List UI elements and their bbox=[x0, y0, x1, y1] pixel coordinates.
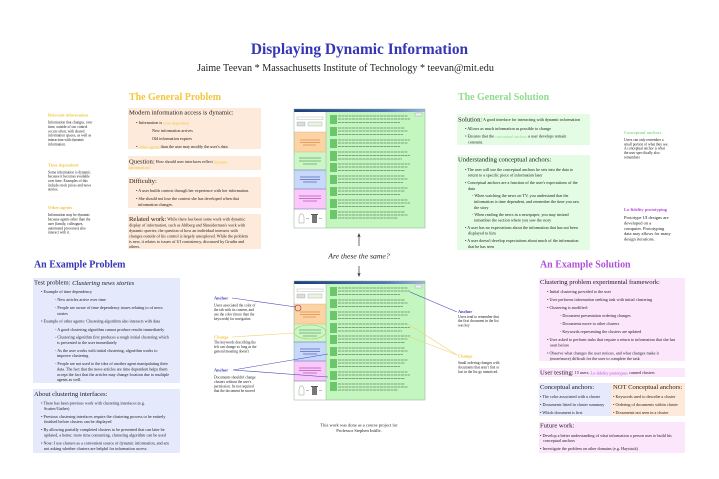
panel: clustering experimental framework: • User performs information seeking task with initial clustering bbox=[547, 297, 652, 302]
panel: difficulty: Difficulty: bbox=[129, 178, 157, 185]
sidebar: conceptual anchors: Users can only remember a bbox=[624, 138, 664, 142]
panel: related work: dynamic queries, the question of how an individual interacts with bbox=[129, 228, 239, 234]
panel: future work: Future work: bbox=[540, 422, 574, 430]
panel: conceptual anchors list: • Documents listed in cluster summary bbox=[540, 402, 605, 407]
sidebar: conceptual anchors: small portion of what they see. bbox=[624, 142, 669, 146]
panel: understanding conceptual anchors: • The user will use the conceptual anchors he sets into the data to bbox=[465, 167, 573, 172]
panel: test problem: • Example of time dependency bbox=[41, 289, 93, 294]
panel: related work: is new, it relates to issues of UI consistency, discussed by Grudin and bbox=[129, 239, 245, 245]
panel: solution: • Ensures that the conceptual anchors a user develops remain bbox=[465, 134, 567, 138]
panel: clustering experimental framework: - Documents move to other clusters bbox=[560, 321, 620, 326]
panel: about clustering interfaces: Scatter/Gather) bbox=[44, 406, 70, 411]
sidebar: conceptual anchors: Conceptual anchors bbox=[624, 130, 662, 135]
sidebar: time dependent bbox=[48, 162, 92, 192]
screenshot: clustering interface, annotated bbox=[294, 281, 425, 400]
sidebar: other agents bbox=[48, 205, 91, 235]
annotation: anchor, documents: Documents shouldn't change bbox=[214, 376, 256, 380]
panel: test problem bbox=[33, 278, 180, 383]
panel: question: information? bbox=[129, 165, 151, 170]
panel: about clustering interfaces: updated, a better, more time consuming, clustering algorithm can be used bbox=[44, 432, 167, 438]
panel: modern information access: Modern information access is dynamic: bbox=[129, 110, 234, 116]
annotation: anchor, first document: was key bbox=[458, 324, 470, 328]
annotation: change, ordering: lost in the list go unnoticed. bbox=[458, 370, 498, 374]
sidebar: relevant information: interaction with dynamic bbox=[48, 138, 84, 142]
sidebar: lo-fidelity prototyping: Prototype UI designs are bbox=[624, 215, 669, 220]
panel: related work: others. bbox=[129, 244, 140, 249]
sidebar: relevant information bbox=[48, 112, 93, 146]
panel: test problem: agents as well. bbox=[57, 377, 81, 382]
panel: understanding conceptual anchors: information is time dependent, and remember the time you saw bbox=[474, 199, 579, 205]
annotation: change, ordering: documents that aren't first or bbox=[458, 366, 500, 370]
annotation: change, keywords: The keywords describing the bbox=[214, 340, 256, 344]
sidebar: conceptual anchors: remembers bbox=[624, 155, 641, 159]
panel: future work: conceptual anchors bbox=[543, 438, 575, 443]
annotation: change, ordering: Small ordering changes with bbox=[458, 361, 500, 365]
panel: test problem: - People are aware of time dependency issues relating to of news bbox=[55, 305, 163, 310]
footer note: This work was done as a course project for bbox=[320, 422, 398, 428]
panel: understanding conceptual anchors: return to a specific piece of information later bbox=[468, 172, 543, 178]
screenshot: dynamic clustering interface, original bbox=[294, 109, 425, 228]
sidebar: relevant information: information spaces, as well as bbox=[48, 134, 92, 139]
panel: understanding conceptual anchors: - When watching the news on TV, you understand that the bbox=[472, 193, 569, 199]
panel: solution bbox=[457, 114, 590, 145]
panel: about clustering interfaces: About clustering interfaces: bbox=[34, 391, 108, 398]
panel: conceptual anchors list: • Which document is first bbox=[540, 410, 583, 415]
panel: understanding conceptual anchors: the story bbox=[474, 205, 489, 210]
annotation: anchor, tab colour: keywords) for navigation bbox=[214, 317, 251, 321]
panel: user testing bbox=[539, 368, 685, 377]
sidebar: relevant information: time, outside of our control bbox=[48, 125, 87, 130]
panel: test problem: - New articles arrive over time bbox=[55, 297, 106, 302]
heading: the general problem: The General Problem bbox=[129, 92, 222, 103]
panel: modern information access: • Other agents than the user may modify the user's data bbox=[136, 144, 228, 149]
panel: understanding conceptual anchors: - When reading the news in a newspaper, you may instead bbox=[472, 212, 570, 218]
panel: clustering experimental framework: • User asked to perform tasks that require a return to information that she has bbox=[547, 337, 676, 342]
annotation: anchor, tab colour: use the color (more than the bbox=[214, 312, 255, 316]
heading: an example problem: An Example Problem bbox=[34, 260, 126, 270]
panel: understanding conceptual anchors: that he has seen bbox=[468, 244, 495, 249]
panel: test problem: stories bbox=[57, 311, 68, 316]
panel: question bbox=[128, 156, 261, 170]
sidebar: lo-fidelity prototyping: data may allows for many bbox=[624, 231, 671, 236]
footer note: Professor Stephen Intille. bbox=[336, 428, 382, 433]
annotation: anchor, first document bbox=[410, 292, 499, 328]
panel: user testing: User testing: 15 users, Lo-fidelity prototypes, canned clusters bbox=[540, 369, 655, 376]
panel: understanding conceptual anchors: • A user has no expectations about the information that has not been bbox=[465, 225, 579, 230]
sidebar: other agents: automated processes) also bbox=[48, 226, 86, 230]
panel: clustering experimental framework: - Keywords representing the clusters are updated bbox=[560, 329, 642, 334]
panel: not conceptual anchors list: • Documents not seen in a cluster bbox=[613, 410, 669, 415]
annotation: anchor, tab colour: the tab with its content, and bbox=[214, 308, 254, 313]
annotation: change, ordering: Change bbox=[458, 354, 472, 358]
panel: modern information access bbox=[128, 108, 261, 149]
panel: understanding conceptual anchors: data bbox=[468, 186, 475, 191]
panel: clustering experimental framework: • Clustering is modified: bbox=[547, 305, 588, 310]
panel: modern information access: • Information is time-dependent bbox=[136, 120, 190, 125]
panel: related work: Related work: While there has been some work with dynamic bbox=[129, 216, 246, 222]
panel: about clustering interfaces: • Previous clustering interfaces require the clustering process to be entirely bbox=[41, 414, 166, 419]
subtitle: author and affiliation: Jaime Teevan * Massachusetts Institute of Technology * teevan@mit.edu bbox=[197, 63, 494, 74]
sidebar: lo-fidelity prototyping: design iterations. bbox=[624, 236, 655, 242]
panel: solution: Solution: A good interface for interacting with dynamic information bbox=[458, 116, 581, 123]
annotation: anchor, first document: Anchor bbox=[458, 309, 472, 314]
sidebar: other agents: interact with it. bbox=[48, 231, 70, 235]
panel: test problem: is presented to the user immediately bbox=[57, 340, 118, 345]
sidebar: time dependent: because it becomes available bbox=[48, 175, 90, 179]
annotation: anchor, first document: Users tend to remember that bbox=[458, 315, 499, 319]
panel: solution: • Allows as much information as possible to change bbox=[465, 126, 551, 131]
sidebar: time dependent: stories. bbox=[48, 188, 58, 192]
panel: not conceptual anchors list: NOT Conceptual anchors: bbox=[613, 384, 682, 391]
arrow: down from question bbox=[358, 266, 360, 276]
annotation: anchor, documents: Anchor bbox=[214, 368, 228, 372]
annotation: change, ordering bbox=[408, 324, 500, 374]
panel: not conceptual anchors list: • Ordering of documents within cluster bbox=[613, 402, 678, 407]
sidebar: time dependent: over time. Examples of this bbox=[48, 179, 88, 183]
panel: test problem: accept the fact that the articles may change location due to multiple bbox=[57, 372, 169, 377]
panel: solution: constant. bbox=[468, 140, 483, 144]
panel: modern information access: New information arrives bbox=[152, 128, 193, 133]
sidebar: time dependent: Time dependent bbox=[48, 162, 79, 168]
panel: not conceptual anchors list: • Keywords used to describe a cluster bbox=[613, 394, 676, 399]
annotation: change, keywords: Change bbox=[214, 334, 228, 340]
panel: related work: display of information, such as Ahlberg and Shneiderman's work with bbox=[129, 222, 246, 228]
panel: clustering experimental framework bbox=[539, 278, 685, 361]
annotation: anchor, first document: the first document in the list bbox=[458, 319, 499, 323]
panel: test problem: - As the user works with initial clustering, algorithm works to bbox=[55, 348, 157, 354]
sidebar: lo-fidelity prototyping: developed on a bbox=[624, 220, 651, 226]
panel: about clustering interfaces: • Note: I use clusters as a convenient source of dynamic information, and am bbox=[41, 440, 169, 446]
panel: test problem: improve clustering bbox=[57, 353, 88, 358]
panel: conceptual anchors list: Conceptual anchors: bbox=[540, 384, 594, 391]
title: Displaying Dynamic Information bbox=[251, 41, 469, 58]
sidebar: other agents: user (family, colleagues, bbox=[48, 222, 83, 227]
sidebar: conceptual anchors: A conceptual anchor is what bbox=[624, 147, 665, 151]
panel: conceptual anchors list: • The color associated with a cluster bbox=[540, 394, 601, 399]
sidebar: lo-fidelity prototyping bbox=[624, 207, 671, 242]
panel: test problem: • Example of other agents: Clustering algorithm also interacts with data bbox=[41, 318, 160, 324]
panel: related work bbox=[128, 214, 261, 249]
footer note bbox=[320, 422, 398, 433]
annotation: change, keywords: general meaning doesn't bbox=[214, 350, 249, 354]
annotation: change, keywords: left can change so long as the bbox=[214, 345, 257, 349]
annotation: anchor, tab colour: Users associated the color of bbox=[214, 304, 256, 308]
sidebar: relevant information: Information that changes, over bbox=[48, 121, 93, 126]
panel: clustering experimental framework: • Initial clustering provided to the user bbox=[547, 289, 612, 294]
annotation: anchor, tab colour: Anchor bbox=[214, 296, 228, 300]
heading: an example solution: An Example Solution bbox=[540, 260, 631, 270]
panel: question: Question: How should user interfaces reflect dynamic bbox=[129, 158, 228, 165]
panel: future work: • Investigate the problem on other domains (e.g. Haystack) bbox=[540, 446, 639, 451]
panel: clustering experimental framework: Clustering problem experimental framework: bbox=[540, 279, 660, 286]
panel: future work bbox=[539, 422, 685, 453]
panel: related work: changes outside of his control is largely unexplored. While the problem bbox=[129, 234, 249, 238]
panel: about clustering interfaces: not asking whether clusters are helpful for information access bbox=[44, 446, 147, 451]
panel: test problem: Test problem: Clustering news stories bbox=[34, 280, 135, 286]
panel: clustering experimental framework: - Document presentation ordering changes bbox=[560, 313, 631, 318]
panel: not conceptual anchors list bbox=[611, 383, 685, 416]
panel: about clustering interfaces bbox=[33, 389, 180, 453]
heading: the general solution: The General Solution bbox=[458, 92, 550, 103]
panel: understanding conceptual anchors: Understanding conceptual anchors: bbox=[458, 156, 551, 164]
arrow: up from question bbox=[358, 234, 360, 246]
sidebar: other agents: because agents other than the bbox=[48, 217, 91, 221]
panel: about clustering interfaces: • By allowing partially completed clusters to be presented that can later be bbox=[41, 427, 165, 432]
panel: understanding conceptual anchors: remember the section where you saw the story bbox=[474, 218, 552, 222]
panel: difficulty: • A user builds context through her experience with her information. bbox=[136, 188, 249, 193]
panel: difficulty: information changes. bbox=[138, 202, 173, 207]
panel: future work: • Develop a better understanding of what information a person uses to build his bbox=[540, 433, 672, 438]
sidebar: relevant information: occurs often; with shared bbox=[48, 129, 85, 133]
sidebar: other agents: Other agents bbox=[48, 205, 72, 210]
sidebar: lo-fidelity prototyping: computer. Prototyping bbox=[624, 226, 665, 231]
sidebar: time dependent: include stock prices and news bbox=[48, 183, 92, 187]
sidebar: other agents: Information may be dynamic bbox=[48, 213, 90, 217]
panel: about clustering interfaces: finished before clusters can be displayed bbox=[44, 419, 112, 424]
sidebar: relevant information: information. bbox=[48, 142, 66, 146]
sidebar: conceptual anchors bbox=[624, 130, 669, 159]
sidebar: conceptual anchors: the user specifically also bbox=[624, 151, 660, 155]
annotation: anchor, documents: permission. Its not required bbox=[214, 384, 254, 388]
panel: clustering experimental framework: • Observe what changes the user notices, and what changes make it bbox=[547, 350, 660, 356]
question: are these the same: Are these the same? bbox=[327, 252, 390, 260]
panel: difficulty bbox=[128, 177, 261, 208]
panel: test problem: - People are not used to the idea of another agent manipulating their bbox=[55, 361, 168, 366]
sidebar: time dependent: Some information is dynamic bbox=[48, 170, 91, 174]
sidebar: lo-fidelity prototyping: Lo-fidelity prototyping bbox=[624, 207, 668, 212]
panel: clustering experimental framework: (more/more) difficult for the user to complete the task bbox=[550, 356, 641, 361]
annotation: change, keywords bbox=[214, 333, 294, 354]
annotation: anchor, documents: clusters without the user's bbox=[214, 380, 252, 384]
panel: modern information access: Old information expires bbox=[152, 136, 192, 141]
panel: understanding conceptual anchors: displayed to him bbox=[468, 230, 496, 236]
panel: conceptual anchors list bbox=[539, 383, 611, 416]
panel: understanding conceptual anchors: • A user doesn't develop expectations about much of the information bbox=[465, 238, 579, 243]
annotation: anchor, tab colour bbox=[214, 296, 296, 321]
panel: test problem: data. The fact that the news articles are time dependent helps them bbox=[57, 366, 168, 372]
sidebar: relevant information: Relevant information bbox=[48, 112, 89, 118]
panel: difficulty: • She should not lose the context she has developed when that bbox=[136, 196, 240, 201]
panel: understanding conceptual anchors bbox=[457, 155, 590, 250]
annotation: anchor, documents bbox=[214, 354, 328, 393]
panel: about clustering interfaces: • There has been previous work with clustering interfaces (e.g. bbox=[41, 400, 145, 406]
panel: clustering experimental framework: seen before bbox=[550, 342, 569, 348]
annotation: anchor, documents: that the document be moved bbox=[214, 389, 255, 393]
panel: test problem: - Clustering algorithm first produces a rough initial clustering which bbox=[55, 334, 170, 340]
panel: test problem: - A good clustering algorithm cannot produce results immediately bbox=[55, 327, 165, 332]
panel: understanding conceptual anchors: • Conceptual anchors are a function of the user's expectations of the bbox=[465, 180, 578, 185]
